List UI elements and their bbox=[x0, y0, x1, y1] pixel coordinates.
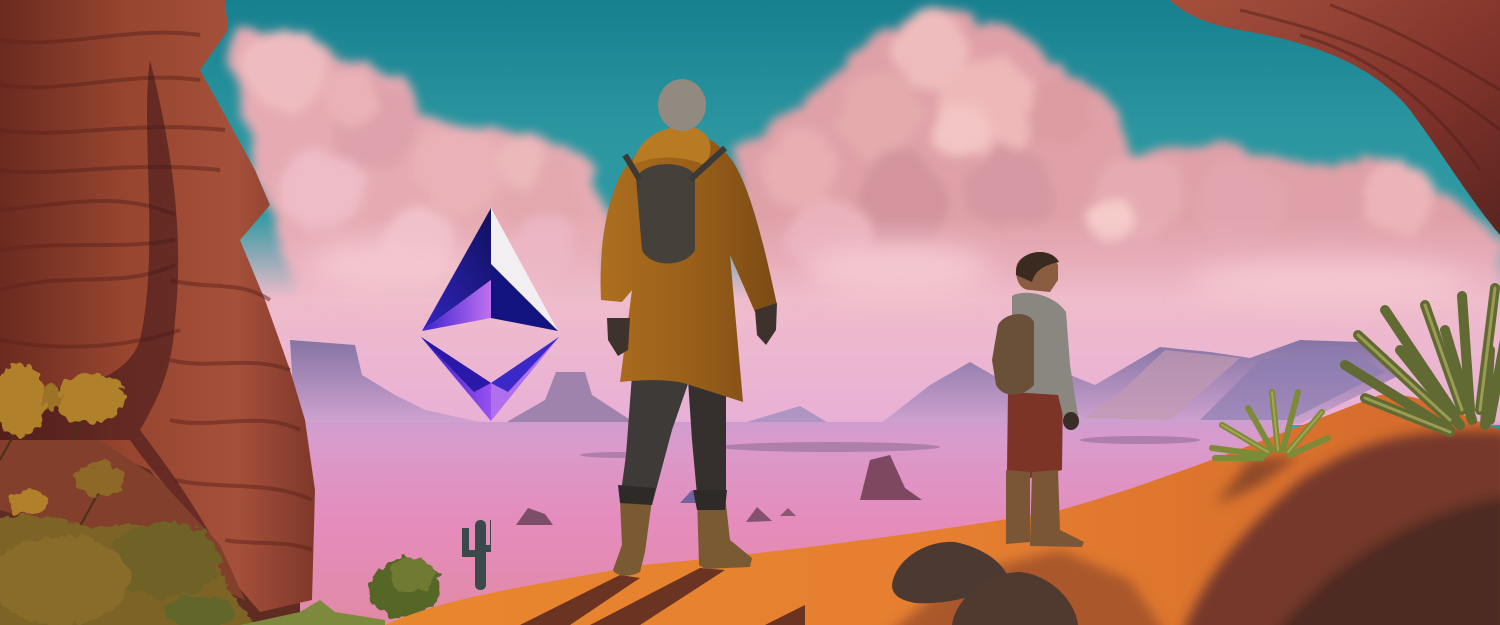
mountain: central butte bbox=[505, 372, 635, 423]
boy: backpack bbox=[992, 314, 1034, 395]
man: head bbox=[658, 79, 706, 131]
rocks: foreground bbox=[892, 542, 1078, 625]
mountains: small center bbox=[740, 406, 830, 424]
dune: shadow under boy bbox=[880, 550, 1170, 625]
man: left glove bbox=[607, 318, 630, 356]
boy: torso bbox=[1012, 293, 1078, 420]
icon: Ethereum logo bbox=[421, 208, 559, 421]
boy: legs bbox=[1007, 388, 1063, 478]
haze: lower sky bbox=[230, 215, 1500, 425]
rock: lower ledge bbox=[0, 440, 245, 600]
man: right boot bbox=[697, 495, 752, 569]
cloud: left bbox=[230, 27, 610, 300]
rock: left cliff bbox=[0, 0, 315, 625]
mountains: right ranges bbox=[880, 340, 1400, 424]
man: right leg bbox=[688, 380, 726, 495]
floor: rocks bbox=[516, 455, 922, 525]
figure: boy bbox=[992, 252, 1084, 547]
plant: small agave bbox=[1212, 392, 1328, 458]
plant: bottom center-left bbox=[240, 600, 385, 625]
mountains: left mesa bbox=[290, 340, 480, 422]
icon: cactus bbox=[462, 520, 491, 590]
trees: left bbox=[0, 364, 126, 535]
man: coat bbox=[601, 134, 777, 402]
dune: man's shadow bbox=[520, 568, 725, 625]
man: boot cuffs bbox=[618, 485, 727, 510]
cloud wisps: low right bbox=[310, 241, 1470, 304]
rock: cliff crevice shadow bbox=[0, 60, 240, 590]
man: backpack bbox=[636, 164, 695, 264]
dune: foreground bbox=[385, 394, 1500, 625]
plant: large agave bbox=[1345, 288, 1500, 432]
man: hood bbox=[632, 127, 710, 165]
figure: man bbox=[601, 79, 777, 576]
bush: center bbox=[369, 557, 441, 618]
dune: plant shadow bbox=[1215, 455, 1300, 505]
desert floor bbox=[290, 422, 1290, 625]
floor: distant ridges bbox=[580, 436, 1200, 458]
cloud: right cumulus bbox=[735, 9, 1500, 320]
man: left boot bbox=[613, 500, 652, 576]
boy: boots bbox=[1006, 470, 1084, 547]
distant mountains bbox=[290, 340, 1400, 424]
clouds bbox=[230, 9, 1500, 320]
boy: head bbox=[1016, 254, 1058, 292]
bushes: bottom left bbox=[0, 515, 260, 625]
man: left leg bbox=[620, 375, 690, 505]
boy: hand bbox=[1063, 412, 1079, 430]
dune: shadow right bbox=[880, 431, 1500, 625]
rock: top-right overhang bbox=[1170, 0, 1500, 235]
sky bbox=[0, 0, 1500, 440]
rock: cliff lower base bbox=[0, 430, 300, 625]
rock: cliff strata bbox=[0, 33, 312, 550]
man: right glove bbox=[755, 303, 777, 345]
